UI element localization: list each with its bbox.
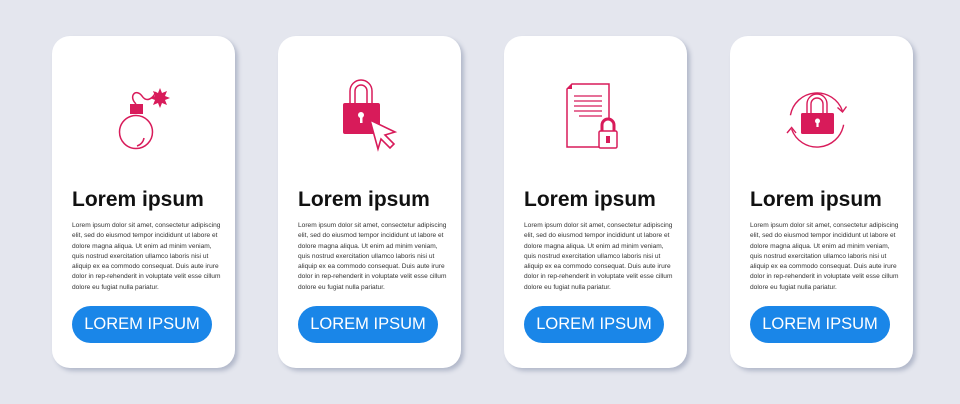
- panel: card 1: [52, 36, 235, 368]
- heading: Lorem ipsum: [298, 188, 430, 211]
- button: LOREM IPSUM: [536, 315, 652, 333]
- button: [750, 306, 890, 343]
- icon: rotating lock: [786, 92, 847, 148]
- button: LOREM IPSUM: [84, 315, 200, 333]
- icon: bomb: [118, 88, 170, 150]
- button: [524, 306, 664, 343]
- icon: document with lock: [566, 83, 618, 149]
- heading: Lorem ipsum: [72, 188, 204, 211]
- text block: Lorem ipsum dolor sit amet, consectetur adipiscing elit, sed do eiusmod tempor incididunt ut labore et dolore magna aliqua. Ut enim ad minim veniam, quis nostrud exercitation ullamco laboris nisi ut aliquip ex ea commodo consequat. Duis aute irure dolor in rep-rehenderit in voluptate velit esse cillum dolore eu fugiat nulla pariatur.: [72, 222, 220, 291]
- button: [298, 306, 438, 343]
- icon: lock with cursor: [343, 79, 398, 152]
- button: [72, 306, 212, 343]
- button: LOREM IPSUM: [310, 315, 426, 333]
- heading: Lorem ipsum: [524, 188, 656, 211]
- button: LOREM IPSUM: [762, 315, 878, 333]
- panel: card 4: [730, 36, 913, 368]
- text block: Lorem ipsum dolor sit amet, consectetur adipiscing elit, sed do eiusmod tempor incididunt ut labore et dolore magna aliqua. Ut enim ad minim veniam, quis nostrud exercitation ullamco laboris nisi ut aliquip ex ea commodo consequat. Duis aute irure dolor in rep-rehenderit in voluptate velit esse cillum dolore eu fugiat nulla pariatur.: [298, 222, 446, 291]
- text block: Lorem ipsum dolor sit amet, consectetur adipiscing elit, sed do eiusmod tempor incididunt ut labore et dolore magna aliqua. Ut enim ad minim veniam, quis nostrud exercitation ullamco laboris nisi ut aliquip ex ea commodo consequat. Duis aute irure dolor in rep-rehenderit in voluptate velit esse cillum dolore eu fugiat nulla pariatur.: [750, 222, 898, 291]
- panel: card 3: [504, 36, 687, 368]
- text block: Lorem ipsum dolor sit amet, consectetur adipiscing elit, sed do eiusmod tempor incididunt ut labore et dolore magna aliqua. Ut enim ad minim veniam, quis nostrud exercitation ullamco laboris nisi ut aliquip ex ea commodo consequat. Duis aute irure dolor in rep-rehenderit in voluptate velit esse cillum dolore eu fugiat nulla pariatur.: [524, 222, 672, 291]
- panel: card 2: [278, 36, 461, 368]
- heading: Lorem ipsum: [750, 188, 882, 211]
